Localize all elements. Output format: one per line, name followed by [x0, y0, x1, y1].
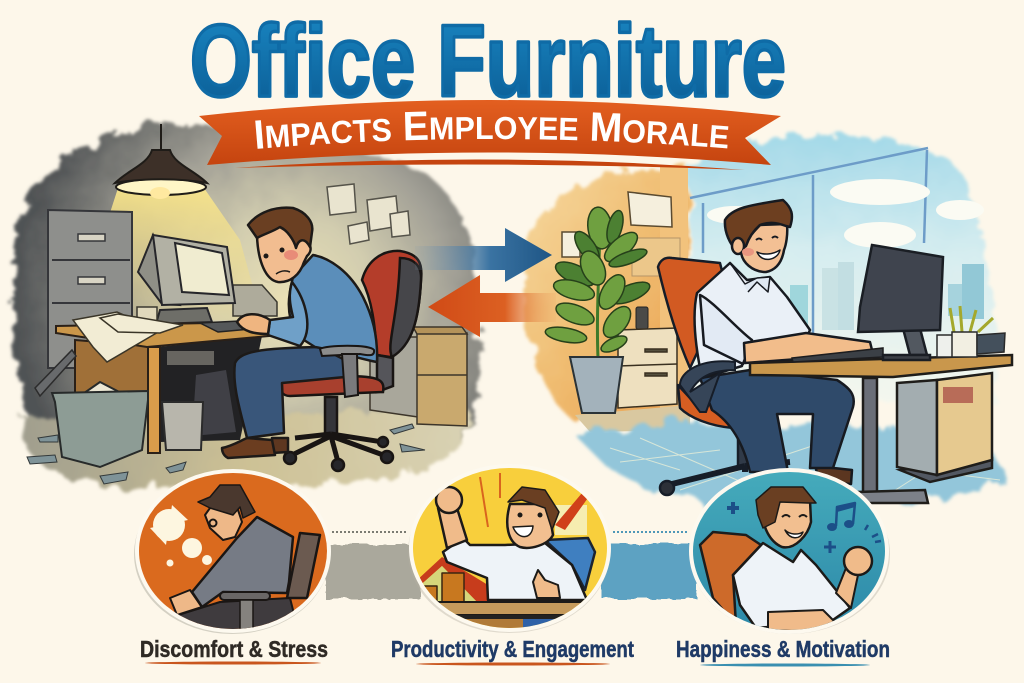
table leg: [466, 619, 523, 628]
plate and boxes under desk: [167, 351, 236, 436]
badge scene: [139, 473, 327, 629]
base legs: [672, 462, 790, 484]
ribbon underline: [235, 159, 745, 170]
eyes: [520, 512, 540, 518]
closed eyes: [782, 515, 807, 517]
fist: [844, 547, 872, 575]
badge shadow: [134, 474, 330, 634]
shirt: [695, 263, 810, 378]
hair: [725, 200, 792, 252]
background cabinets: [370, 327, 467, 426]
chair back: [658, 258, 723, 368]
thumbs-up hand: [533, 570, 560, 598]
teal background: [693, 472, 885, 630]
office chair good: [658, 258, 790, 495]
cheek: [742, 248, 754, 256]
floor grid: [610, 438, 1000, 500]
icon: music note: [828, 503, 855, 530]
face: [205, 507, 242, 540]
red wedge: [590, 582, 610, 602]
pain bursts: [150, 505, 212, 566]
keyboard: [200, 321, 262, 332]
badge scene: [693, 472, 885, 630]
blue trousers: [523, 619, 554, 628]
panel: good office scene: [526, 135, 1012, 510]
torso and arm: [192, 517, 293, 607]
pale chart area: [422, 566, 476, 601]
raised forearm: [836, 568, 858, 608]
red chart slope: [415, 557, 488, 602]
armrest post: [240, 600, 253, 632]
wall notes: [562, 192, 672, 257]
connector band grey: [325, 544, 420, 599]
panel: productivity and engagement: [391, 460, 634, 666]
faint wall chart: [632, 238, 680, 276]
dusty floor: [21, 410, 471, 488]
window frame lines: [690, 148, 928, 335]
office chair bad: [280, 251, 421, 471]
far shoe and leg: [815, 466, 852, 484]
caption: Productivity & Engagement: [391, 636, 634, 662]
sleeve: [700, 295, 752, 364]
chair back: [362, 251, 421, 357]
lamp light cone: [90, 188, 262, 320]
printer: [233, 285, 277, 316]
cheek: [284, 250, 298, 260]
armrest: [220, 592, 270, 600]
bars: [419, 573, 464, 602]
badge scene: [413, 468, 607, 628]
sleeve: [268, 282, 307, 346]
up arrow: [555, 494, 587, 530]
skyline: [790, 262, 984, 330]
panel: discomfort and stress: [130, 465, 340, 664]
plant with leaves: [544, 206, 652, 413]
chair: [700, 532, 761, 625]
caption: Discomfort & Stress: [140, 636, 328, 662]
chair back: [287, 533, 320, 598]
shoe: [222, 438, 275, 458]
yellow background: [413, 468, 607, 628]
connector band blue: [602, 544, 697, 599]
desk items: [937, 306, 1005, 357]
hand: [237, 314, 270, 334]
stem: [597, 215, 600, 358]
drawer label: [943, 387, 973, 403]
smiling worker: [695, 200, 872, 484]
icon: hanging lamp: [115, 124, 207, 199]
icon: sparkle: [727, 502, 739, 514]
trousers: [700, 370, 854, 472]
hair: [198, 485, 255, 518]
panel: happiness and motivation: [676, 465, 895, 666]
pot: [570, 357, 623, 413]
arrow: blue to the right: [415, 228, 552, 282]
drawer tan side: [937, 373, 992, 475]
modern desk: [750, 355, 1012, 503]
drawer unit: [900, 458, 992, 482]
caption underline: [416, 662, 610, 666]
badge ring: [409, 464, 611, 632]
face: [507, 504, 553, 548]
collar: [730, 263, 770, 292]
dotted connector left: [332, 531, 408, 533]
table: [428, 602, 593, 615]
motion ticks: [865, 525, 881, 542]
orange background: [139, 473, 327, 629]
keyboard: [792, 348, 883, 362]
column: [738, 428, 752, 468]
chair armrest: [680, 361, 735, 412]
chair armrest: [320, 346, 374, 397]
wall notes: [327, 184, 410, 244]
arrow: orange to the left: [428, 275, 556, 337]
under-desk shadow: [158, 336, 262, 442]
grey smudged wall: [13, 124, 479, 440]
dotted connector right: [613, 531, 688, 533]
chair: [545, 538, 595, 590]
legs: [178, 597, 294, 629]
blue floor: [577, 420, 1007, 510]
mouth: [513, 526, 533, 537]
ribbon shape: [199, 100, 781, 165]
shirt: [733, 543, 850, 628]
badge shadow: [408, 471, 610, 633]
papers on desk: [73, 312, 183, 362]
badge ring: [135, 469, 331, 633]
far shoe: [272, 438, 288, 453]
wheels: [284, 437, 393, 471]
caption underline: [145, 662, 321, 664]
frown: [276, 271, 290, 274]
desk top: [750, 355, 1012, 377]
arm and hand: [768, 610, 838, 632]
trash bin with papers: [52, 382, 148, 467]
caption: Happiness & Motivation: [676, 636, 890, 662]
caption underline: [700, 664, 870, 666]
face: [764, 500, 811, 547]
flat monitor: [858, 245, 943, 360]
seat: [280, 376, 383, 396]
seat: [678, 385, 775, 428]
chair link: [377, 355, 393, 392]
eye: [280, 248, 284, 252]
pale chart card: [555, 505, 587, 535]
hair: [756, 487, 816, 528]
warm wall: [526, 165, 688, 420]
raised arm: [438, 508, 467, 548]
hands: [170, 590, 202, 615]
shirt: [289, 255, 377, 362]
banner subtitle: IMPACTS EMPLOYEE MORALE: [255, 112, 728, 149]
title: Office Furniture: [190, 4, 786, 118]
sharp wall edge: [660, 167, 688, 417]
small speaker: [636, 307, 648, 329]
badge shadow: [690, 474, 890, 634]
wheel: [660, 481, 674, 495]
fist: [436, 487, 462, 513]
sky wash: [690, 135, 996, 400]
clouds: [707, 179, 984, 248]
spark lines: [480, 473, 500, 527]
eyes: [756, 236, 778, 240]
column: [325, 397, 337, 435]
CRT monitor: [138, 235, 235, 324]
small bin: [162, 402, 203, 450]
table shadow strip: [457, 615, 563, 619]
badge ring: [689, 468, 889, 634]
hair: [508, 487, 559, 530]
pale floor shadow: [575, 405, 690, 432]
messy desk: [56, 322, 280, 453]
face: [257, 227, 311, 282]
trousers: [234, 347, 345, 438]
drawer grey side: [897, 380, 937, 475]
leaves: [544, 206, 652, 355]
icon: sparkle: [824, 541, 836, 553]
foot: [857, 490, 928, 503]
smile: [757, 250, 780, 259]
ear: [732, 238, 744, 254]
background broom: [35, 350, 76, 396]
panel: bad office scene: [13, 124, 479, 488]
shirt: [443, 538, 587, 600]
eye: [264, 254, 268, 258]
smile: [785, 530, 803, 538]
banner: [199, 100, 781, 170]
leg: [863, 378, 877, 496]
face: [741, 224, 787, 272]
hair: [248, 208, 312, 248]
cabinet: [618, 328, 677, 408]
base legs: [290, 434, 386, 462]
floor debris: [27, 424, 425, 484]
glasses: [210, 520, 216, 526]
slouched worker: [222, 208, 377, 458]
chair back rear: [390, 258, 421, 357]
filing cabinet: [48, 210, 132, 368]
forearm: [744, 333, 872, 363]
mug: [137, 307, 157, 321]
